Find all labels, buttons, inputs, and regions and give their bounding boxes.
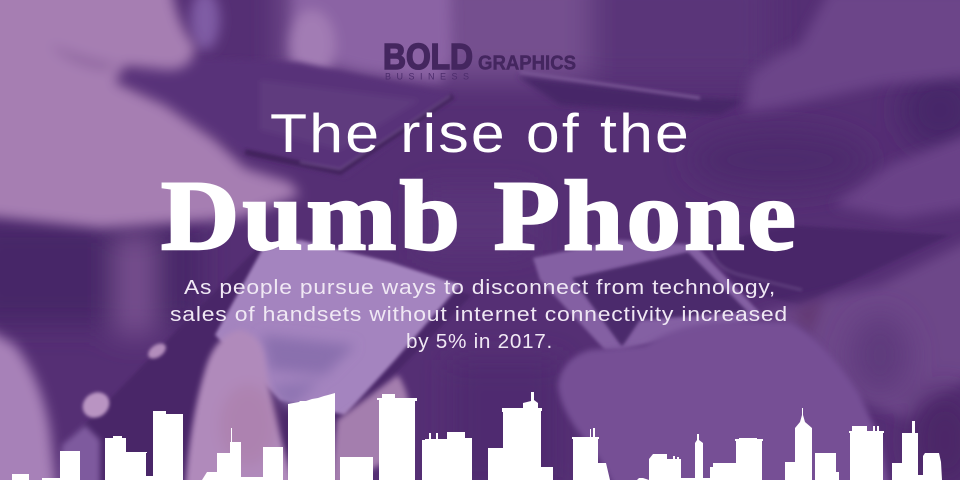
subtitle text: As people pursue ways to disconnect from technology,	[184, 276, 776, 299]
title line 1: The rise of the	[270, 102, 691, 164]
right hand upper	[745, 0, 960, 112]
top left phone edge	[245, 96, 453, 172]
palm behind phone	[330, 375, 411, 480]
lower left phone body	[60, 243, 472, 480]
lower left phone screen	[215, 240, 460, 415]
subtitle text	[170, 276, 788, 353]
white city skyline	[12, 392, 942, 480]
right phone frame	[533, 240, 765, 350]
logo word GRAPHICS: GRAPHICS	[478, 52, 576, 74]
left pale hand	[0, 325, 58, 480]
right hand lower	[755, 235, 960, 420]
title line 2: Dumb Phone	[161, 160, 799, 271]
top left hand	[0, 0, 300, 228]
thumb	[185, 330, 295, 480]
screen content	[262, 335, 355, 410]
logo: Bold Business Graphics	[383, 36, 576, 82]
top right phone	[517, 76, 745, 115]
fingernails	[78, 340, 169, 423]
large foreground hand	[558, 320, 890, 480]
right phone screen	[572, 252, 748, 347]
lower left phone bottom corner	[60, 425, 100, 480]
subtitle text: by 5% in 2017.	[406, 330, 553, 353]
top left phone body	[118, 58, 455, 176]
logo word BOLD: BOLD	[383, 36, 473, 77]
top right phone edge	[520, 72, 700, 98]
subtitle text: sales of handsets without internet connectivity increased	[170, 303, 788, 326]
logo word BUSINESS: BUSINESS	[385, 72, 469, 82]
right hand middle finger	[833, 130, 960, 218]
top centre hand and fingers	[190, 0, 452, 82]
dark phone upper right	[705, 225, 950, 305]
